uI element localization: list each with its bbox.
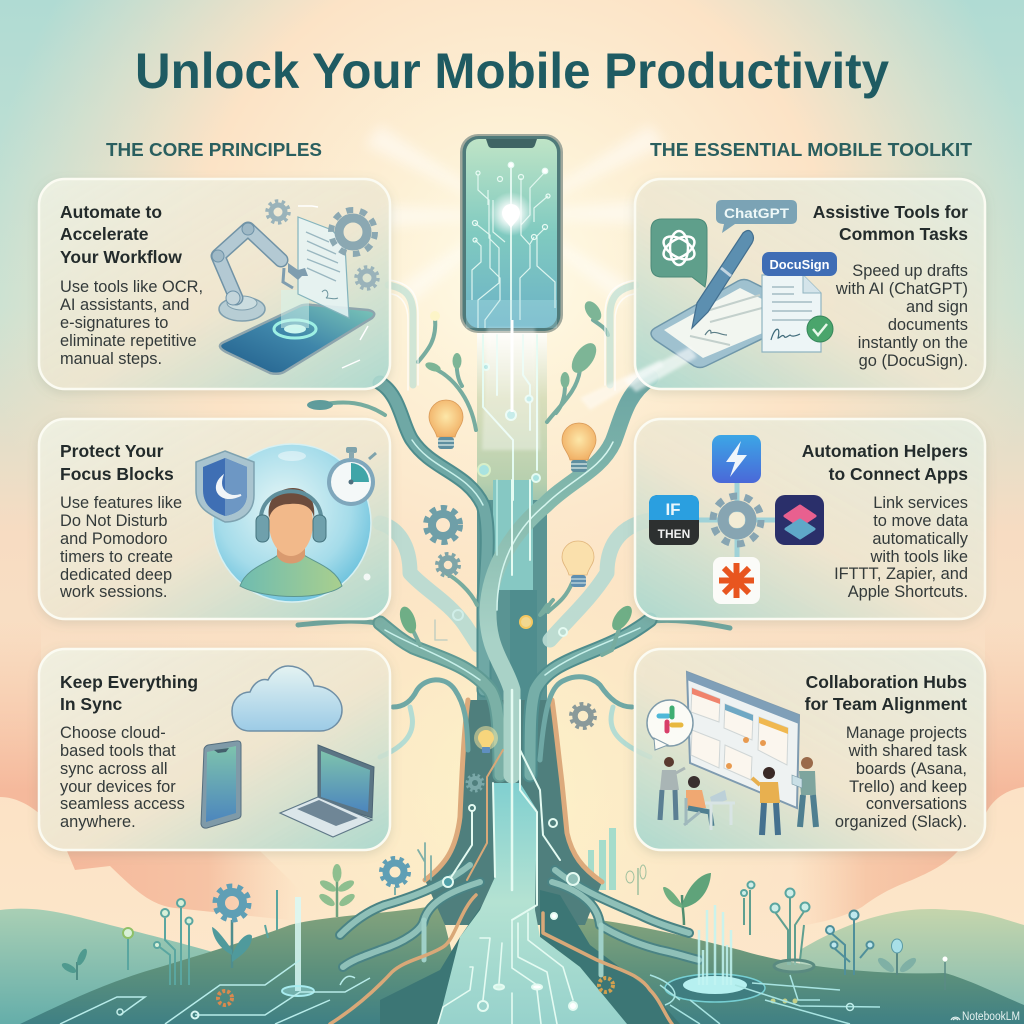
heading: Automation Helpers — [802, 441, 968, 461]
light beam below phone — [482, 320, 540, 450]
icon: check badge — [807, 316, 833, 342]
body text: go (DocuSign). — [859, 352, 968, 370]
body text: with shared task — [848, 742, 968, 760]
body text: and sign — [906, 298, 968, 316]
icon: tablet and pen — [580, 200, 837, 410]
roots — [340, 865, 699, 967]
panel: focus — [39, 419, 390, 619]
heading: Automate to — [60, 202, 162, 222]
front swoop branch — [488, 378, 650, 775]
body text: Trello) and keep — [849, 778, 967, 796]
heading: Assistive Tools for — [813, 202, 968, 222]
central phone — [460, 134, 563, 333]
plant: bulb sprout — [876, 939, 918, 975]
heading: Collaboration Hubs — [806, 672, 967, 692]
phone notch — [486, 139, 537, 148]
icon: zapier app — [713, 557, 760, 604]
ground circuit lines — [60, 960, 370, 1024]
body text: timers to create — [60, 548, 173, 566]
circuit road — [438, 783, 627, 1024]
phone glow core — [489, 192, 533, 236]
body text: conversations — [866, 795, 967, 813]
icon: laptop — [280, 745, 374, 837]
body text: e-signatures to — [60, 314, 168, 332]
landscape hills — [0, 905, 1024, 1024]
icon: gear hub — [713, 496, 761, 544]
body text: documents — [888, 316, 968, 334]
trunk flare — [425, 700, 602, 925]
panel: sync — [39, 649, 390, 850]
leaves — [307, 298, 636, 636]
panel: automate — [39, 179, 390, 389]
label: ChatGPT bubble: ChatGPT — [724, 205, 789, 221]
body text: work sessions. — [59, 583, 167, 601]
pale translucent branches — [380, 520, 650, 645]
body text: Apple Shortcuts. — [848, 583, 968, 601]
heading: In Sync — [60, 694, 123, 714]
title: Unlock Your Mobile Productivity — [135, 43, 889, 99]
pale connector pipes from the cards — [388, 285, 636, 385]
body text: sync across all — [60, 760, 167, 778]
body text: your devices for — [60, 778, 176, 796]
body text: boards (Asana, — [856, 760, 967, 778]
mid trunk column — [477, 480, 547, 790]
person: seated at desk — [684, 776, 735, 830]
icon: connected apps — [649, 435, 824, 604]
body text: instantly on the — [858, 334, 968, 352]
body text: dedicated deep — [60, 566, 172, 584]
icon: IF THEN app — [649, 495, 699, 545]
icon: pen — [692, 230, 754, 328]
icon: gear large trunk — [426, 508, 460, 542]
heading: Your Workflow — [60, 247, 182, 267]
circuit stalks cluster center — [741, 882, 810, 965]
body text: Speed up drafts — [852, 262, 968, 280]
body text: automatically — [872, 530, 969, 548]
icon: IF THEN app: THEN — [658, 527, 690, 541]
plant: sprout — [60, 947, 89, 980]
plant: large sprout — [663, 873, 711, 925]
body text: AI assistants, and — [60, 296, 189, 314]
body text: Manage projects — [846, 724, 967, 742]
body text: and Pomodoro — [60, 530, 168, 548]
left main branch — [380, 383, 487, 690]
body text: based tools that — [60, 742, 176, 760]
icon: gear small trunk — [437, 554, 459, 576]
phone circuit lines — [472, 165, 555, 328]
tree: trunk, roots and branches — [298, 280, 730, 1024]
icon: stopwatch — [327, 447, 376, 506]
dark ground bands — [380, 890, 680, 1024]
icon: gear on stalk — [381, 858, 409, 895]
icon: IF THEN app: IF — [665, 500, 681, 519]
pin marker — [942, 956, 948, 990]
panel: automation helpers — [635, 419, 985, 619]
ring on ground — [774, 960, 814, 972]
icon: cloud — [232, 666, 342, 731]
icon: gear low trunk — [467, 775, 483, 791]
icon: document — [762, 275, 821, 352]
bottom left plants and gears — [60, 858, 409, 1024]
icon: lightning app — [712, 435, 761, 483]
glowing circuit lines — [438, 335, 573, 1024]
watermark icon — [951, 1017, 960, 1020]
label: DocuSign: DocuSign — [770, 258, 830, 272]
body text: manual steps. — [60, 350, 162, 368]
body text: seamless access — [60, 795, 185, 813]
body text: Choose cloud- — [60, 724, 166, 742]
body text: to move data — [873, 512, 969, 530]
small gear on ground — [218, 991, 232, 1005]
icon: phone device — [201, 741, 241, 828]
circuit stalks cluster right — [826, 910, 874, 975]
icons on the tree: bulbs, gears and leaves — [307, 298, 636, 791]
body text: Do Not Disturb — [60, 512, 167, 530]
plant: seedling — [317, 864, 357, 917]
circuit stalks — [123, 890, 277, 985]
section heading left: THE CORE PRINCIPLES — [106, 140, 322, 160]
icon: phone with robot arm and document — [212, 201, 378, 374]
person: woman standing — [660, 757, 685, 820]
panel: assistive tools — [580, 179, 985, 410]
small dots — [770, 998, 798, 1004]
lower branches — [298, 621, 385, 625]
label: DocuSign — [762, 252, 837, 276]
icon: slack bubble — [647, 700, 693, 750]
body text: with AI (ChatGPT) — [835, 280, 968, 298]
heading: for Team Alignment — [805, 694, 967, 714]
body text: with tools like — [870, 548, 968, 566]
plant: pale seedling — [626, 865, 646, 895]
person: man with tablet — [792, 757, 816, 827]
small gear on ground — [599, 978, 613, 992]
icon: shield with moon — [196, 451, 254, 522]
icon: light bulb mid right — [562, 541, 594, 587]
icon: light bulb upper right — [562, 423, 596, 472]
section heading right: THE ESSENTIAL MOBILE TOOLKIT — [650, 140, 972, 160]
heading: to Connect Apps — [829, 464, 968, 484]
heading: Protect Your — [60, 441, 164, 461]
heading: Focus Blocks — [60, 464, 174, 484]
heading: Accelerate — [60, 224, 149, 244]
icon: small glowing bulb — [474, 726, 498, 753]
body text: Link services — [873, 494, 968, 512]
light beam — [282, 897, 314, 996]
upper trunk column — [477, 333, 547, 523]
ground circuit lines — [650, 975, 880, 1024]
icon: gear right trunk — [571, 704, 595, 728]
small stalks by the trunk — [418, 843, 431, 880]
icon: light bulb upper left — [429, 400, 463, 449]
thin branches — [320, 318, 622, 655]
body text: IFTTT, Zapier, and — [834, 565, 968, 583]
body text: Use features like — [60, 494, 182, 512]
body text: anywhere. — [60, 813, 136, 831]
bars behind trunk — [588, 828, 616, 890]
heading: Common Tasks — [839, 224, 968, 244]
tan stripes — [330, 895, 476, 1024]
icon: shortcuts app — [775, 495, 824, 545]
arches — [393, 677, 632, 760]
icon: gear flower — [212, 886, 252, 968]
task board — [687, 672, 799, 808]
person: man in yellow — [752, 767, 780, 835]
panel: collaboration hubs — [635, 649, 985, 850]
body text: eliminate repetitive — [60, 332, 197, 350]
illustration: task board and team — [647, 672, 816, 835]
heading: Keep Everything — [60, 672, 198, 692]
body text: Use tools like OCR, — [60, 278, 203, 296]
body text: organized (Slack). — [835, 813, 967, 831]
data fountain — [665, 905, 765, 1002]
bottom right plants and circuits — [599, 865, 948, 1024]
icon: person in focus bubble — [196, 444, 376, 602]
icon: AI logo tile — [651, 219, 707, 287]
label: ChatGPT bubble — [716, 200, 797, 233]
